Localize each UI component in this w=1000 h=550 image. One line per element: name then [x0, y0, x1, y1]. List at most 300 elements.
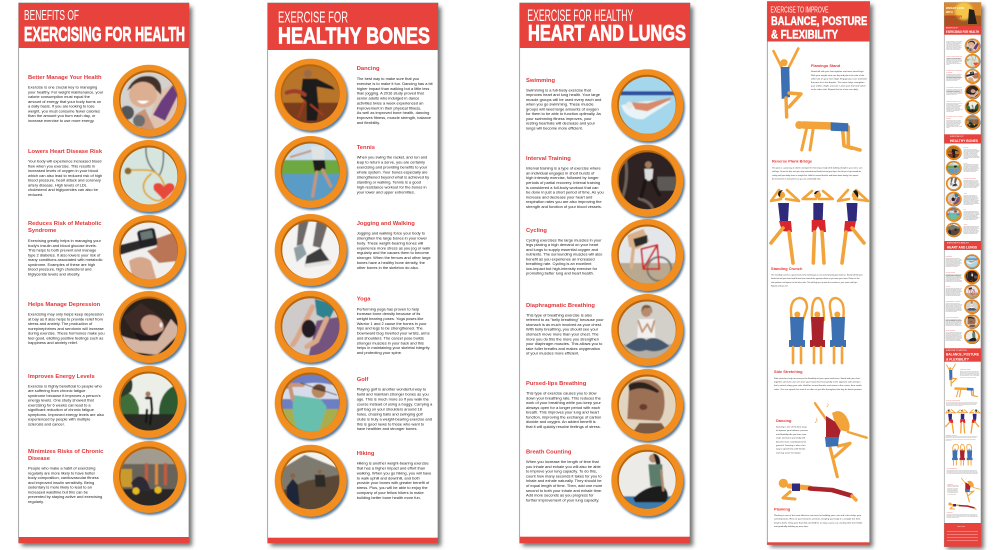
item: hiking: company of your fellow hikers to make [357, 490, 424, 495]
item: reduces risk of metabolic syndrome: body's insulin and blood glucose levels. [28, 243, 97, 248]
figure: reverse plank bridge [795, 121, 860, 150]
section: heart and lungs thumbnail [946, 254, 980, 344]
item: lowers heart disease risk: increased levels of oxygen in your blood [28, 168, 98, 173]
item: swimming: resting heartrate will decrease and your [526, 121, 596, 126]
section band: healthy bones: EXERCISE FOR [950, 136, 964, 138]
item: flamingo stand: the pose for a few breaths. This move helps strengthen [811, 81, 865, 84]
item: interval training: respiration rates you are also improving the [526, 199, 602, 204]
panel content [28, 65, 186, 515]
item: pursed-lips breathing: dioxide and oxygen. An added benefit is [526, 419, 596, 424]
item: minimizes risks of chronic disease: regularly. [28, 499, 44, 504]
item: swimming [526, 78, 601, 130]
item: golf: build and maintain stronger bones as you [357, 392, 429, 397]
item: flamingo stand: Stand tall with your feet together and arms raised high. [811, 70, 864, 73]
item: breath counting: further improvement of your lung capacity. [526, 497, 599, 502]
item: dancing: way to spend time with friends [776, 448, 806, 451]
item: diaphragmatic breathing: stomach move more than your chest. The [526, 332, 599, 336]
item: dancing: Dancing is one of the best ways [776, 426, 808, 428]
item: better manage your health: calorie consumption must equal the [28, 94, 91, 99]
item: helps manage depression: Exercising may only helps keep depression [28, 312, 104, 317]
item: yoga: helps in maintaining your skeletal integrity [357, 345, 430, 350]
item: tennis: leap to return a serve, you are certainly [357, 160, 425, 165]
item: better manage your health: weight, you must consume fewer calories [28, 108, 100, 113]
item: cycling [526, 228, 603, 276]
item: cycling: nutrients. The surrounding muscles will also [526, 252, 603, 257]
photo: glucose meter in hands [113, 215, 186, 289]
item: pursed-lips breathing [526, 381, 602, 429]
item: pursed-lips breathing: down your breathing rate. This reduces the [526, 395, 602, 400]
section band: balance and posture: & FLEXIBILITY [946, 356, 969, 361]
item: standing crunch: hands behind your head and lift one knee toward the opposite elbow as you twist your torso. Return to the [771, 277, 860, 280]
item: better manage your health [28, 75, 104, 123]
item: cycling: breathing rate. Cycling is an excellent [526, 261, 592, 266]
item: tennis: your lower and upper extremities. [357, 190, 415, 195]
photo: woman with pursed lips [611, 369, 685, 443]
panel: exercise for healthy bones [268, 3, 441, 546]
item: breath counting: count how many seconds it takes for you to [526, 473, 602, 478]
item: reduces risk of metabolic syndrome [28, 221, 102, 276]
item: lowers heart disease risk: blood pressure, heart attack and coronary [28, 178, 101, 183]
header band: EXERCISING FOR HEALTH [24, 24, 185, 46]
item: jogging and walking: stronger. When the femurs and other large [357, 255, 431, 260]
header band: & FLEXIBILITY [771, 27, 838, 41]
item: breath counting: second to both your inhale and exhale time. [526, 488, 602, 493]
item: pursed-lips breathing: function, improving the exchange of carbon [526, 414, 601, 419]
item: diaphragmatic breathing: take fuller breaths and makes oxygenation [526, 346, 600, 351]
item: planking: Planking [774, 506, 791, 512]
item: reverse plank bridge: ceiling until your body forms a straight line. Hold for several breaths and lower down slowly, then repeat [772, 174, 859, 177]
item: minimizes risks of chronic disease [28, 449, 104, 504]
item: yoga: hips and legs to be strengthened. The [357, 326, 424, 331]
item: golf: Golf [357, 377, 368, 383]
section band: healthy bones [944, 134, 981, 144]
section band: exercising for health: EXERCISING FOR HEALTH [946, 30, 979, 34]
item: yoga: Yoga [357, 297, 371, 303]
hero image with title: BETTER [946, 14, 962, 19]
item: reverse plank bridge: This pose is a great way to stretch and open the front of your body while building strength in your arms, core [772, 166, 862, 170]
item: golf: golf bag on your shoulders around 18 [357, 406, 423, 411]
item: diaphragmatic breathing [526, 303, 604, 356]
item: reduces risk of metabolic syndrome: Reduces Risk of Metabolic [28, 221, 102, 227]
item: hiking [357, 451, 432, 500]
item: minimizes risks of chronic disease: prevented by staying active and exercising [28, 494, 102, 499]
item: side stretching: together and raise one arm over your head, then lean gently to the opposite side until you [774, 380, 861, 384]
item: better manage your health: amount of energy that your body burns on [28, 99, 101, 104]
item: jogging and walking [357, 221, 431, 270]
item: improves energy levels: experienced by people with multiple [28, 417, 91, 422]
panel: exercise for healthy heart and lungs [520, 3, 693, 546]
item: breath counting: When you increase the length of time that [526, 459, 600, 464]
item: yoga: weight bearing poses. Yoga poses like [357, 316, 424, 321]
header band [19, 3, 189, 48]
item: jogging and walking: regularly and the causes them to become [357, 250, 430, 255]
item: dancing: activities twice a week experienced an [357, 100, 423, 105]
header band [268, 3, 438, 50]
figure: flamingo stand [774, 48, 801, 117]
item: diaphragmatic breathing: Diaphragmatic Breathing [526, 303, 595, 309]
item: improves energy levels: significant reduction of chronic fatigue [28, 407, 95, 412]
item: helps manage depression: norepinephrines and serotonin will increase [28, 326, 105, 331]
item: side stretching [774, 369, 863, 391]
item: pursed-lips breathing: airways open for a longer period with each [526, 405, 600, 410]
item: dancing: and flexibility. As you learn new [776, 433, 807, 436]
figure: dancer with music notes: ♪ [826, 402, 830, 409]
item: improves energy levels: syndrome because it improves a person's [28, 393, 101, 398]
item: dancing: senior adults who indulged in dance [357, 96, 420, 101]
item: golf: this is good news to those who want to [357, 421, 425, 426]
item: hiking: stress. Plus, you will be able to enjoy the [357, 485, 428, 490]
footer band [268, 538, 438, 543]
item: helps manage depression [28, 302, 105, 345]
item: dancing: steps and turns your body will [776, 437, 805, 440]
hero image with title: WITH [946, 10, 953, 14]
hero image with title: WEIGHT LOSS [946, 6, 964, 10]
item: dancing [357, 66, 434, 125]
item: breath counting: of equal length of time. Then, add one more [526, 483, 603, 488]
section: bones thumbnail [946, 145, 981, 237]
item: flamingo stand: Shift your weight onto one leg and place the sole of the [811, 74, 865, 77]
item: helps manage depression: Helps Manage Depression [28, 302, 101, 308]
item: breath counting [526, 450, 603, 502]
item: minimizes risks of chronic disease: and improved insulin sensitivity. Being [28, 480, 94, 485]
item: improves energy levels: sclerosis and cancer. [28, 421, 65, 426]
item: golf: Playing golf is another wonderful way to [357, 387, 427, 392]
item: swimming: muscle groups will be used every each and [526, 97, 601, 102]
item: hiking: that has a higher impact and effort than [357, 466, 425, 470]
item: jogging and walking: Jogging and walking force your body to [357, 231, 426, 236]
item: standing crunch [771, 266, 863, 288]
item: diaphragmatic breathing: of your muscles more efficient. [526, 351, 579, 356]
item: dancing: than jogging. A 2016 study proved that [357, 91, 425, 96]
item: breath counting: you inhale and exhale you will also be able [526, 464, 601, 469]
header band [520, 3, 690, 48]
item: swimming: Swimming [526, 78, 555, 84]
item: swimming: improves heart and lung health. Your large [526, 92, 601, 97]
item: minimizes risks of chronic disease: Disease [28, 456, 51, 462]
item: reverse plank bridge: and legs. Sit on the floor with your legs extended and hands behind your hips, then lift your hips toward the [772, 170, 861, 173]
panel content [526, 69, 685, 518]
section band: balance and posture: EXERCISE TO IMPROVE [946, 350, 968, 352]
item: hiking: provide your bones with greater benefit of [357, 480, 430, 485]
header band: BENEFITS OF [24, 7, 79, 24]
item: swimming: for them to be able to function optimally. As [526, 111, 601, 116]
item: diaphragmatic breathing: referred to as "belly breathing" because your [526, 317, 604, 322]
item: lowers heart disease risk: artery disease. High levels of LDL [28, 182, 88, 187]
photo: golfer [275, 367, 348, 441]
item: dancing: higher impact than walking but a little less [357, 86, 429, 91]
item: reduces risk of metabolic syndrome: syndrome. Examples of these are high [28, 262, 95, 267]
item: reduces risk of metabolic syndrome: triglyceride levels and obesity. [28, 271, 80, 276]
item: hiking: building better bone health more fun. [357, 495, 421, 500]
item: interval training: strength and function of your blood vessels. [526, 204, 602, 209]
item: dancing: improves fitness, muscle strength, balance [357, 115, 432, 120]
item: breath counting: Add more seconds as you progress for [526, 493, 594, 498]
item: cycling: low-impact but high-intensity exercise for [526, 266, 598, 271]
item: improves energy levels: are suffering from chronic fatigue [28, 388, 86, 393]
item: diaphragmatic breathing: stomach is as much involved as your chest. [526, 322, 602, 327]
item: jogging and walking: Jogging and Walking [357, 221, 415, 227]
item: better manage your health: than the amount you burn each day, or [28, 113, 96, 118]
footer block [944, 523, 981, 547]
photo: yoga pose [275, 291, 348, 365]
item: lowers heart disease risk: reduced. [28, 192, 43, 197]
item: helps manage depression: happiness and anxiety relief. [28, 340, 78, 345]
item: pursed-lips breathing: Pursed-lips Breathing [526, 381, 587, 387]
item: tennis: strengthened beyond what is achieved by [357, 175, 429, 180]
figure: side stretching, three poses [789, 298, 846, 363]
item: improves energy levels: Improves Energy Levels [28, 374, 95, 380]
item: pursed-lips breathing: that it will quickly resolve feelings of stress. [526, 424, 601, 429]
item: minimizes risks of chronic disease: sedentary is more likely to lead to an [28, 485, 92, 490]
figure: dancer with music notes [814, 402, 867, 477]
hero image with title: FOOD [946, 19, 958, 24]
item: breath counting: to improve your lung capacity. To do this, [526, 469, 597, 474]
item: lowers heart disease risk: Lowers Heart Disease Risk [28, 149, 103, 155]
item: cycling: benefit as you experience an increased [526, 256, 595, 261]
item: standing crunch: The standing crunch is a good exercise for working your core and improving your balance. Stand tall with your [771, 274, 863, 276]
item: jogging and walking: bones have a healthy bone density, the [357, 260, 426, 265]
item: minimizes risks of chronic disease: regularly are more likely to have better [28, 470, 96, 475]
item: better manage your health: increase exercise to use more energy. [28, 118, 94, 123]
header band: EXERCISE FOR HEALTHY [527, 7, 633, 25]
item: dancing [776, 418, 809, 454]
item: flamingo stand: other foot on your inner thigh. Engage your core and hold [811, 77, 867, 80]
photo: jogging shoes [275, 214, 348, 288]
item: swimming: Swimming is a full-body exercise that [526, 87, 592, 92]
item: yoga: Performing yoga has proven to help [357, 306, 420, 311]
item: jogging and walking: body. These weight-bearing bones will [357, 240, 423, 245]
item: standing crunch: Standing Crunch [771, 266, 803, 271]
section band: heart and lungs: HEART AND LUNGS [947, 245, 977, 250]
item: reduces risk of metabolic syndrome: type 2 diabetes. It also lowers your risk of [28, 252, 101, 257]
item: yoga: Downward Dog inverted your wrists, arms [357, 331, 430, 336]
photo: hikers on mountain [275, 445, 348, 519]
item: yoga: stronger muscles in your back and this [357, 340, 424, 345]
item: reduces risk of metabolic syndrome: Exercising greatly helps in managing your [28, 238, 102, 243]
item: lowers heart disease risk: flow when you exercise. This results in [28, 163, 95, 168]
item: interval training: periods of partial recovery. Interval training [526, 180, 600, 185]
section band: balance and posture: BALANCE, POSTURE [946, 352, 979, 356]
item: minimizes risks of chronic disease: increased waistline but this can be [28, 489, 89, 494]
item: tennis: high-resistance workout for the bones in [357, 185, 427, 190]
item: lowers heart disease risk [28, 149, 103, 197]
section band: heart and lungs [944, 241, 981, 250]
item: cycling: Cycling exercises the large muscles in your [526, 237, 602, 242]
section: balance thumbnail [946, 364, 980, 519]
item: tennis: When you swing the racket, and run and [357, 155, 427, 160]
item: yoga [357, 297, 430, 355]
item: tennis: whole system. Your bones especially are [357, 170, 428, 175]
panel: full combined poster thumbnail [944, 2, 984, 549]
footer band [767, 542, 870, 545]
item: dancing: As well as improved bone health, dancing [357, 110, 429, 115]
item: golf: holes, chasing balls and swinging golf [357, 411, 423, 416]
item: golf: clubs is truly a weight-bearing exercise and [357, 416, 432, 421]
item: golf [357, 377, 433, 431]
item: pursed-lips breathing: breath. This improves your lung and heart [526, 410, 600, 415]
item: reverse plank bridge: Reverse Plank Bridge [772, 158, 813, 164]
photo: woman sitting cross-legged [611, 444, 685, 518]
item: reverse plank bridge: the movement as many times as you are comfortable with. [772, 178, 821, 181]
item: tennis [357, 145, 429, 195]
panel content [275, 59, 434, 519]
item: planking: overall posture. Rest on your forearms and toes, keeping your body in a straight line from [774, 518, 860, 521]
photo: woman lifting dumbbell [113, 65, 186, 139]
item: dancing: improvement in their physical fitness, [357, 105, 421, 110]
item: dancing: exercise is to make it fun. Dancing has a bit [357, 81, 434, 86]
item: yoga: and protecting your spine. [357, 350, 402, 355]
item: standing crunch: Repeat until you tire. [771, 285, 789, 288]
section band: exercising for health: BENEFITS OF [946, 28, 959, 30]
section: benefits thumbnail [946, 38, 981, 130]
item: planking: and gradually building up over time. [774, 525, 809, 528]
footer band [19, 537, 189, 543]
item: hiking: walking. When you go hiking, you will have [357, 470, 432, 475]
item: minimizes risks of chronic disease: People who make a habit of exercising [28, 466, 95, 471]
photo: woman meditating [611, 294, 685, 368]
item: improves energy levels: exercising for 6 weeks can lead to a [28, 402, 91, 407]
item: flamingo stand: to the other side. Repeat this for a few sets daily. [811, 88, 859, 91]
item: improves energy levels: Exercise is highly beneficial to people who [28, 383, 103, 388]
item: planking: Planking is one of the most effective exercises for building your core and it also helps your [774, 514, 861, 517]
item: improves energy levels [28, 374, 105, 426]
item: interval training: is considered a full-body workout that can [526, 185, 598, 190]
section band: balance and posture [944, 348, 981, 362]
item: cycling: Cycling [526, 228, 547, 234]
item: diaphragmatic breathing: your diaphragm muscles. This allows you to [526, 341, 603, 346]
footer block: Learn more [957, 526, 965, 528]
photo: ballroom dancers [275, 59, 348, 133]
item: hiking: Hiking is another weight-bearing exercise [357, 461, 430, 466]
item: jogging and walking: strengthen the large bones in your lower [357, 236, 428, 240]
item: flamingo stand: Flamingo Stand [811, 63, 841, 68]
item: hiking: Hiking [357, 451, 375, 457]
item: dancing: to improve your balance, posture [776, 429, 809, 432]
item: interval training: increase and decrease your heart and [526, 194, 592, 199]
item: diaphragmatic breathing: This type of breathing exercise is also [526, 312, 593, 317]
item: flamingo stand [811, 63, 867, 91]
figure: standing crunch, three poses [771, 190, 868, 263]
header band: HEART AND LUNGS [528, 21, 686, 46]
item: standing crunch: start position and repeat on the other side. This will help you to tone the muscles in your waist and hips. [771, 281, 858, 284]
item: interval training: high intensity exercise, followed by longer [526, 175, 599, 180]
item: yoga: increase bone density because of its [357, 311, 420, 316]
item: pursed-lips breathing: work of your breathing while you keep your [526, 400, 602, 405]
item: planking: head to heels. Keep your back flat and hold for as long as you can, starting with short holds [774, 521, 863, 524]
header band [767, 2, 870, 42]
item: jogging and walking: other bones in the skeleton do also. [357, 265, 419, 270]
item: interval training: Interval Training [526, 156, 571, 162]
item: interval training [526, 156, 604, 209]
item: yoga: Warrior 1 and 2 cause the bones in your [357, 321, 427, 326]
item: lowers heart disease risk: Your body will experience increased blood [28, 159, 101, 164]
section band: exercising for health [944, 26, 981, 35]
header band: BALANCE, POSTURE [771, 14, 867, 28]
item: cycling: legs placing a high demand on your heart [526, 242, 599, 247]
item: dancing: and stay active for longer. [776, 451, 801, 454]
photo: tennis player [275, 136, 348, 210]
item: planking [774, 506, 863, 528]
item: golf: age. This is much more so if you walk the [357, 396, 430, 402]
item: pursed-lips breathing: This type of exercise causes you to slow [526, 391, 597, 396]
item: lowers heart disease risk: which can also lead to reduced risk of high [28, 173, 102, 178]
item: golf: have healthier and stronger bones. [357, 426, 418, 431]
item: swimming: groups will need large amounts of oxygen [526, 106, 599, 111]
item: reduces risk of metabolic syndrome: blood pressure, high cholesterol and [28, 267, 91, 272]
item: helps manage depression: stress and anxiety. The production of [28, 321, 93, 326]
item: yoga: and shoulders. The cancel pose builds [357, 335, 424, 340]
item: reduces risk of metabolic syndrome: This helps to both prevent and manage [28, 248, 97, 253]
item: cycling: promoting better lung and heart health. [526, 271, 594, 276]
item: interval training: an individual engages in short bursts of [526, 170, 595, 175]
item: breath counting: inhale and exhale naturally. They should be [526, 478, 602, 483]
item: side stretching: Side stretches help to increase the flexibility of your spine and torso. Stand with your feet [774, 377, 860, 380]
item: tennis: standing or walking. Tennis is a good [357, 180, 421, 185]
section band: heart and lungs: EXERCISE FOR HEALTHY [947, 242, 970, 245]
item: better manage your health: your healthy. For weight maintenance, your [28, 89, 104, 94]
photo: woman with depression [113, 291, 186, 365]
item: improves energy levels: energy levels. One study showed that [28, 398, 95, 403]
figure: planking [779, 479, 856, 500]
header band: EXERCISE FOR [278, 9, 348, 26]
item: golf: course instead of using a buggy. Carrying a [357, 401, 433, 406]
item: swimming: when you go swimming. These muscle [526, 102, 594, 107]
photo: woman with battle tire in gym [611, 145, 685, 219]
panel: benefits of exercising for health [19, 3, 192, 546]
item: flamingo stand: your ankles, thighs and core. Lower your foot and switch [811, 85, 866, 88]
item: breath counting: Breath Counting [526, 450, 572, 456]
item: side stretching: sides. You can repeat this stretch as often as you like throughout the day for better posture. [774, 388, 863, 391]
item: minimizes risks of chronic disease: body composition, cardiovascular fitness [28, 475, 99, 480]
item: side stretching: feel a stretch along your side. Hold for several breaths and return to the center, then switch [774, 384, 863, 387]
item: side stretching: Side Stretching [774, 369, 803, 374]
item: dancing: Dancing [357, 66, 380, 72]
item: helps manage depression: at bay as it also helps to provide relief from [28, 316, 104, 321]
item: hiking: to walk uphill and downhill, and both [357, 475, 420, 480]
photo: gym with kettlebells [113, 441, 186, 515]
photo: cyclist [611, 219, 685, 293]
photo: stethoscope with heart [113, 140, 186, 214]
item: lowers heart disease risk: cholesterol and triglycerides can also be [28, 187, 99, 192]
item: cycling: and lungs to supply essential oxygen and [526, 247, 598, 252]
item: better manage your health: Better Manage Your Health [28, 75, 102, 81]
panel: balance, posture and flexibility [767, 2, 873, 547]
item: reduces risk of metabolic syndrome: Syndrome [28, 228, 57, 234]
figure: dancer with music notes: ♪ [814, 415, 818, 425]
header band: EXERCISE TO IMPROVE [770, 5, 829, 15]
footer band [520, 537, 690, 543]
item: minimizes risks of chronic disease: Minimizes Risks of Chronic [28, 449, 104, 455]
item: swimming: lungs will become more efficient. [526, 125, 583, 130]
section band: healthy bones: HEALTHY BONES [950, 138, 978, 143]
item: helps manage depression: feel good, eliciting positive feelings such as [28, 335, 103, 340]
panel content [771, 48, 868, 528]
photo: woman running in forest [113, 366, 186, 440]
item: swimming: your swimming fitness improves, your [526, 116, 592, 121]
item: reduces risk of metabolic syndrome: many conditions associated with metabolic [28, 257, 102, 262]
item: dancing: Dancing [776, 418, 792, 423]
item: dancing: become more coordinated and [776, 440, 806, 443]
item: better manage your health: Exercise is one crucial key to managing [28, 85, 97, 90]
item: reverse plank bridge [772, 158, 862, 181]
item: diaphragmatic breathing: more you do this the more you strengthen [526, 336, 599, 341]
hero image with title [944, 2, 981, 26]
item: dancing: The best way to make sure that you [357, 76, 419, 81]
item: tennis: exercising and providing benefits to your [357, 165, 428, 170]
item: tennis: Tennis [357, 145, 375, 151]
item: improves energy levels: symptoms. Improved energy levels are also [28, 412, 105, 417]
item: interval training: be done in just a short period of time. As you [526, 190, 604, 195]
